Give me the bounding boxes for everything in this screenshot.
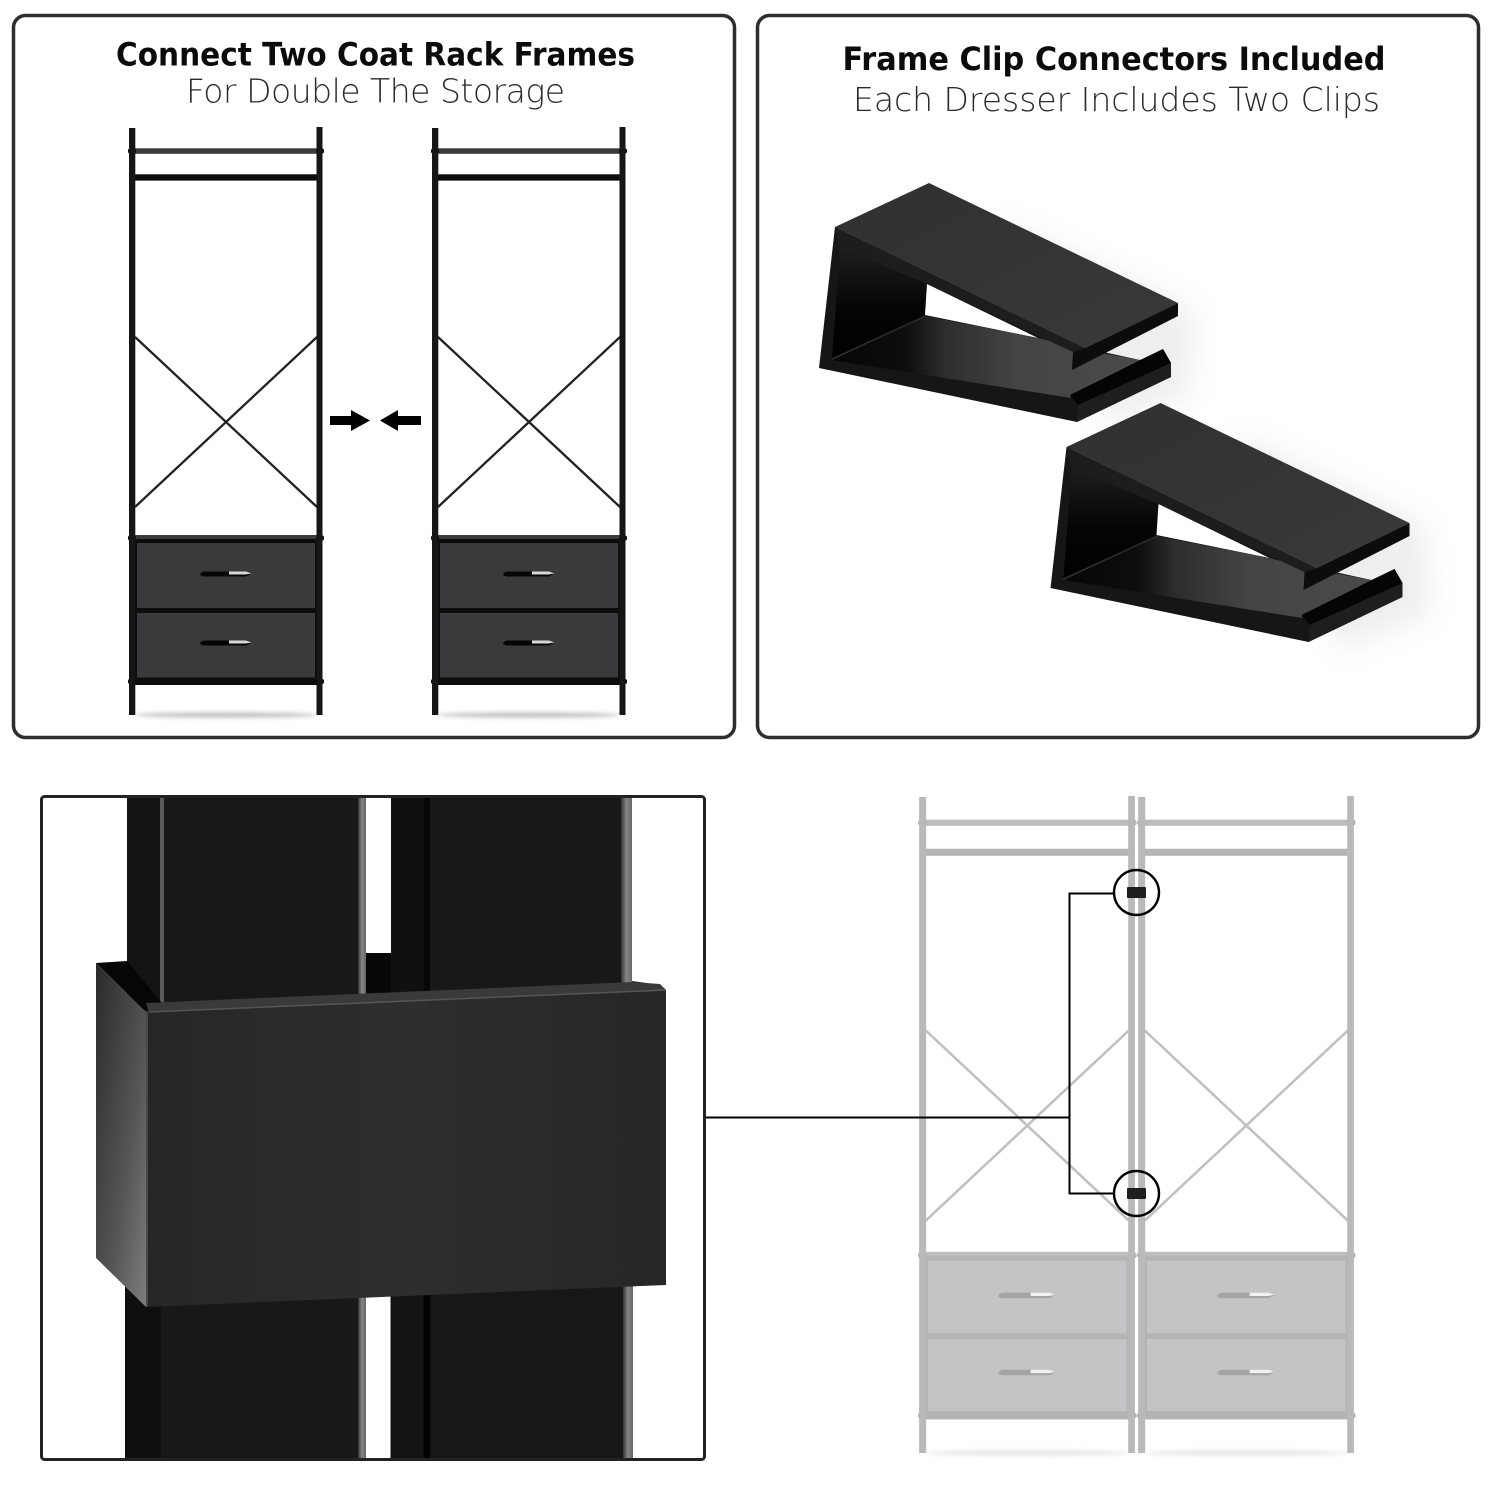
subheading: each dresser includes two clips: Each Dresser Includes Two Clips	[853, 80, 1380, 119]
panel: connect two coat rack frames	[14, 16, 734, 738]
soft shadows under clips	[1000, 220, 1430, 650]
frame post: lower right	[390, 1270, 633, 1458]
clip connector: lower	[1050, 403, 1410, 642]
gray frame: right	[1137, 796, 1356, 1456]
left coat rack frame	[128, 127, 324, 718]
gray diagram of two connected frames	[705, 796, 1356, 1456]
arrow: pointing left	[380, 410, 421, 431]
callout: lower clip location	[1114, 1171, 1159, 1216]
panel: close-up of clip on frames	[42, 796, 704, 1460]
callout: upper clip location	[1114, 870, 1159, 915]
right coat rack frame	[431, 127, 627, 718]
clip connector: upper	[819, 183, 1178, 422]
large clip connector	[96, 961, 666, 1307]
callout leader lines	[705, 894, 1114, 1194]
clip back wall between posts	[366, 953, 428, 1005]
subheading: double the storage: For Double The Storage	[186, 72, 565, 110]
heading: connect two frames: Connect Two Coat Rack Frames	[116, 36, 635, 74]
arrow: pointing right	[330, 410, 370, 431]
gray frame: left	[918, 796, 1137, 1456]
panel: frame clip connectors	[758, 16, 1478, 738]
heading: frame clip connectors included: Frame Clip Connectors Included	[842, 40, 1386, 78]
frame post: lower left	[125, 1270, 366, 1458]
frame post: upper left	[127, 798, 366, 1010]
frame post: upper right	[391, 798, 632, 998]
